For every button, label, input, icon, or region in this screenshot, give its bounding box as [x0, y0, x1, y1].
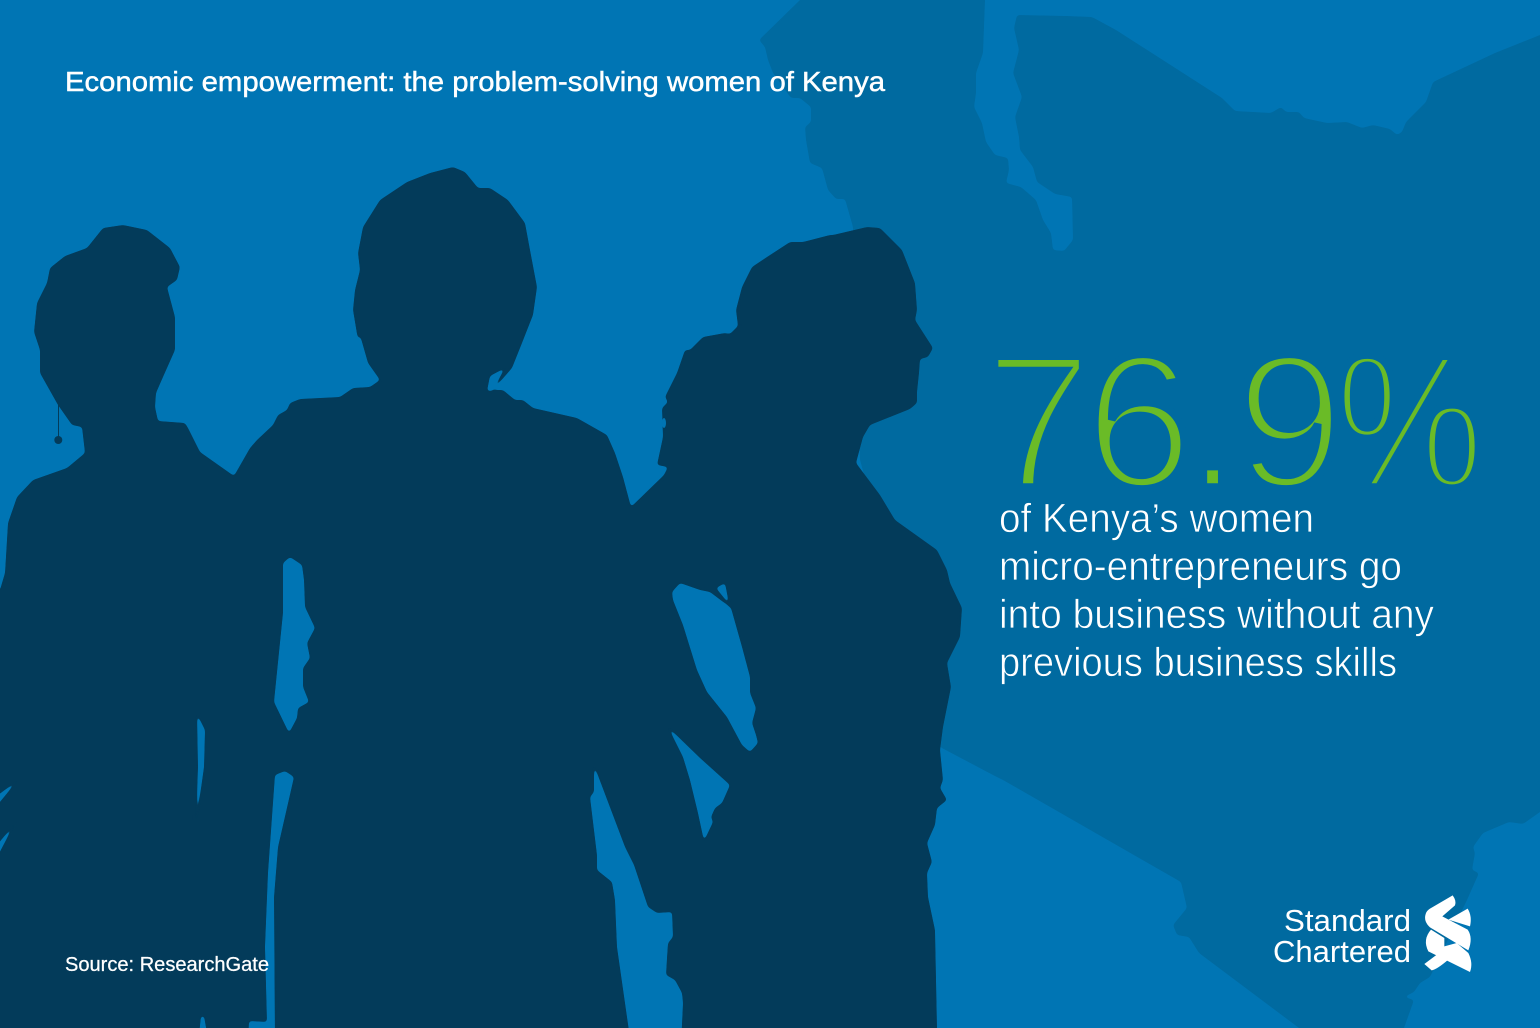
- logo mark: [1424, 895, 1471, 972]
- silhouettes of three women: [0, 167, 962, 1028]
- statistic description: previous business skills: [999, 639, 1397, 685]
- hair gap: [662, 418, 666, 428]
- statistic description: into business without any: [999, 591, 1435, 637]
- source note: Source: ResearchGate: [65, 954, 269, 976]
- logo wordmark: [1273, 903, 1411, 969]
- statistic description: micro-entrepreneurs go: [999, 543, 1402, 589]
- earring: [54, 405, 62, 444]
- big statistic: %: [1335, 315, 1484, 527]
- logo wordmark: Standard: [1284, 903, 1411, 938]
- big statistic: 76.9: [985, 315, 1344, 528]
- title: Economic empowerment: the problem-solving women of Kenya: [65, 66, 885, 97]
- statistic description: of Kenya’s women: [999, 495, 1314, 541]
- logo wordmark: Chartered: [1273, 934, 1411, 969]
- Standard Chartered logo: [1273, 895, 1471, 972]
- map of Kenya region: [759, 0, 1540, 1028]
- statistic description: [999, 495, 1435, 685]
